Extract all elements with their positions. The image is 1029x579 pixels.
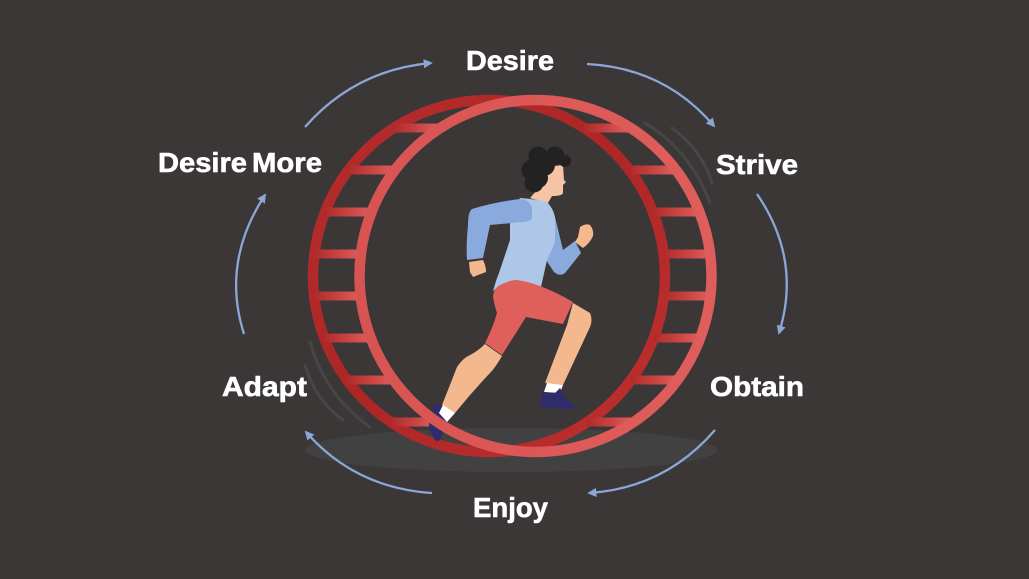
socks (439, 383, 563, 422)
wheel back ring (313, 100, 665, 452)
label: Desire More (158, 147, 322, 178)
wheel front ring (360, 100, 712, 452)
label: Enjoy: Enjoy (473, 492, 548, 523)
runner back shoe (429, 405, 447, 441)
label: Adapt: Adapt (222, 371, 307, 402)
ground shadow (305, 428, 717, 472)
cycle arrows (236, 63, 787, 493)
label: Desire More: Desire (158, 147, 247, 178)
label: Obtain: Obtain (710, 371, 804, 402)
back arm sleeve (467, 199, 532, 260)
arrow: obtain to enjoy (589, 430, 715, 493)
arrow: strive to obtain (757, 194, 787, 333)
front leg (545, 303, 592, 385)
motion lines (305, 123, 712, 427)
hamster wheel (313, 100, 710, 452)
label: Desire More: More (252, 147, 322, 178)
front fist (575, 224, 593, 248)
face and neck (530, 165, 566, 203)
arrow: enjoy to adapt (306, 432, 432, 493)
wheel rungs (314, 124, 710, 426)
torso (493, 198, 555, 291)
shorts (485, 280, 573, 355)
front shoe (539, 388, 576, 409)
back leg (442, 344, 502, 413)
back fist (469, 260, 486, 277)
label: Desire: Desire (466, 45, 554, 76)
label: Strive: Strive (716, 149, 798, 180)
runner (439, 146, 593, 422)
arrow: desire more to desire (305, 63, 431, 127)
arrow: adapt to desire more (236, 195, 265, 334)
front arm (546, 217, 581, 275)
hair (522, 146, 571, 192)
arrow: desire to strive (587, 64, 714, 126)
